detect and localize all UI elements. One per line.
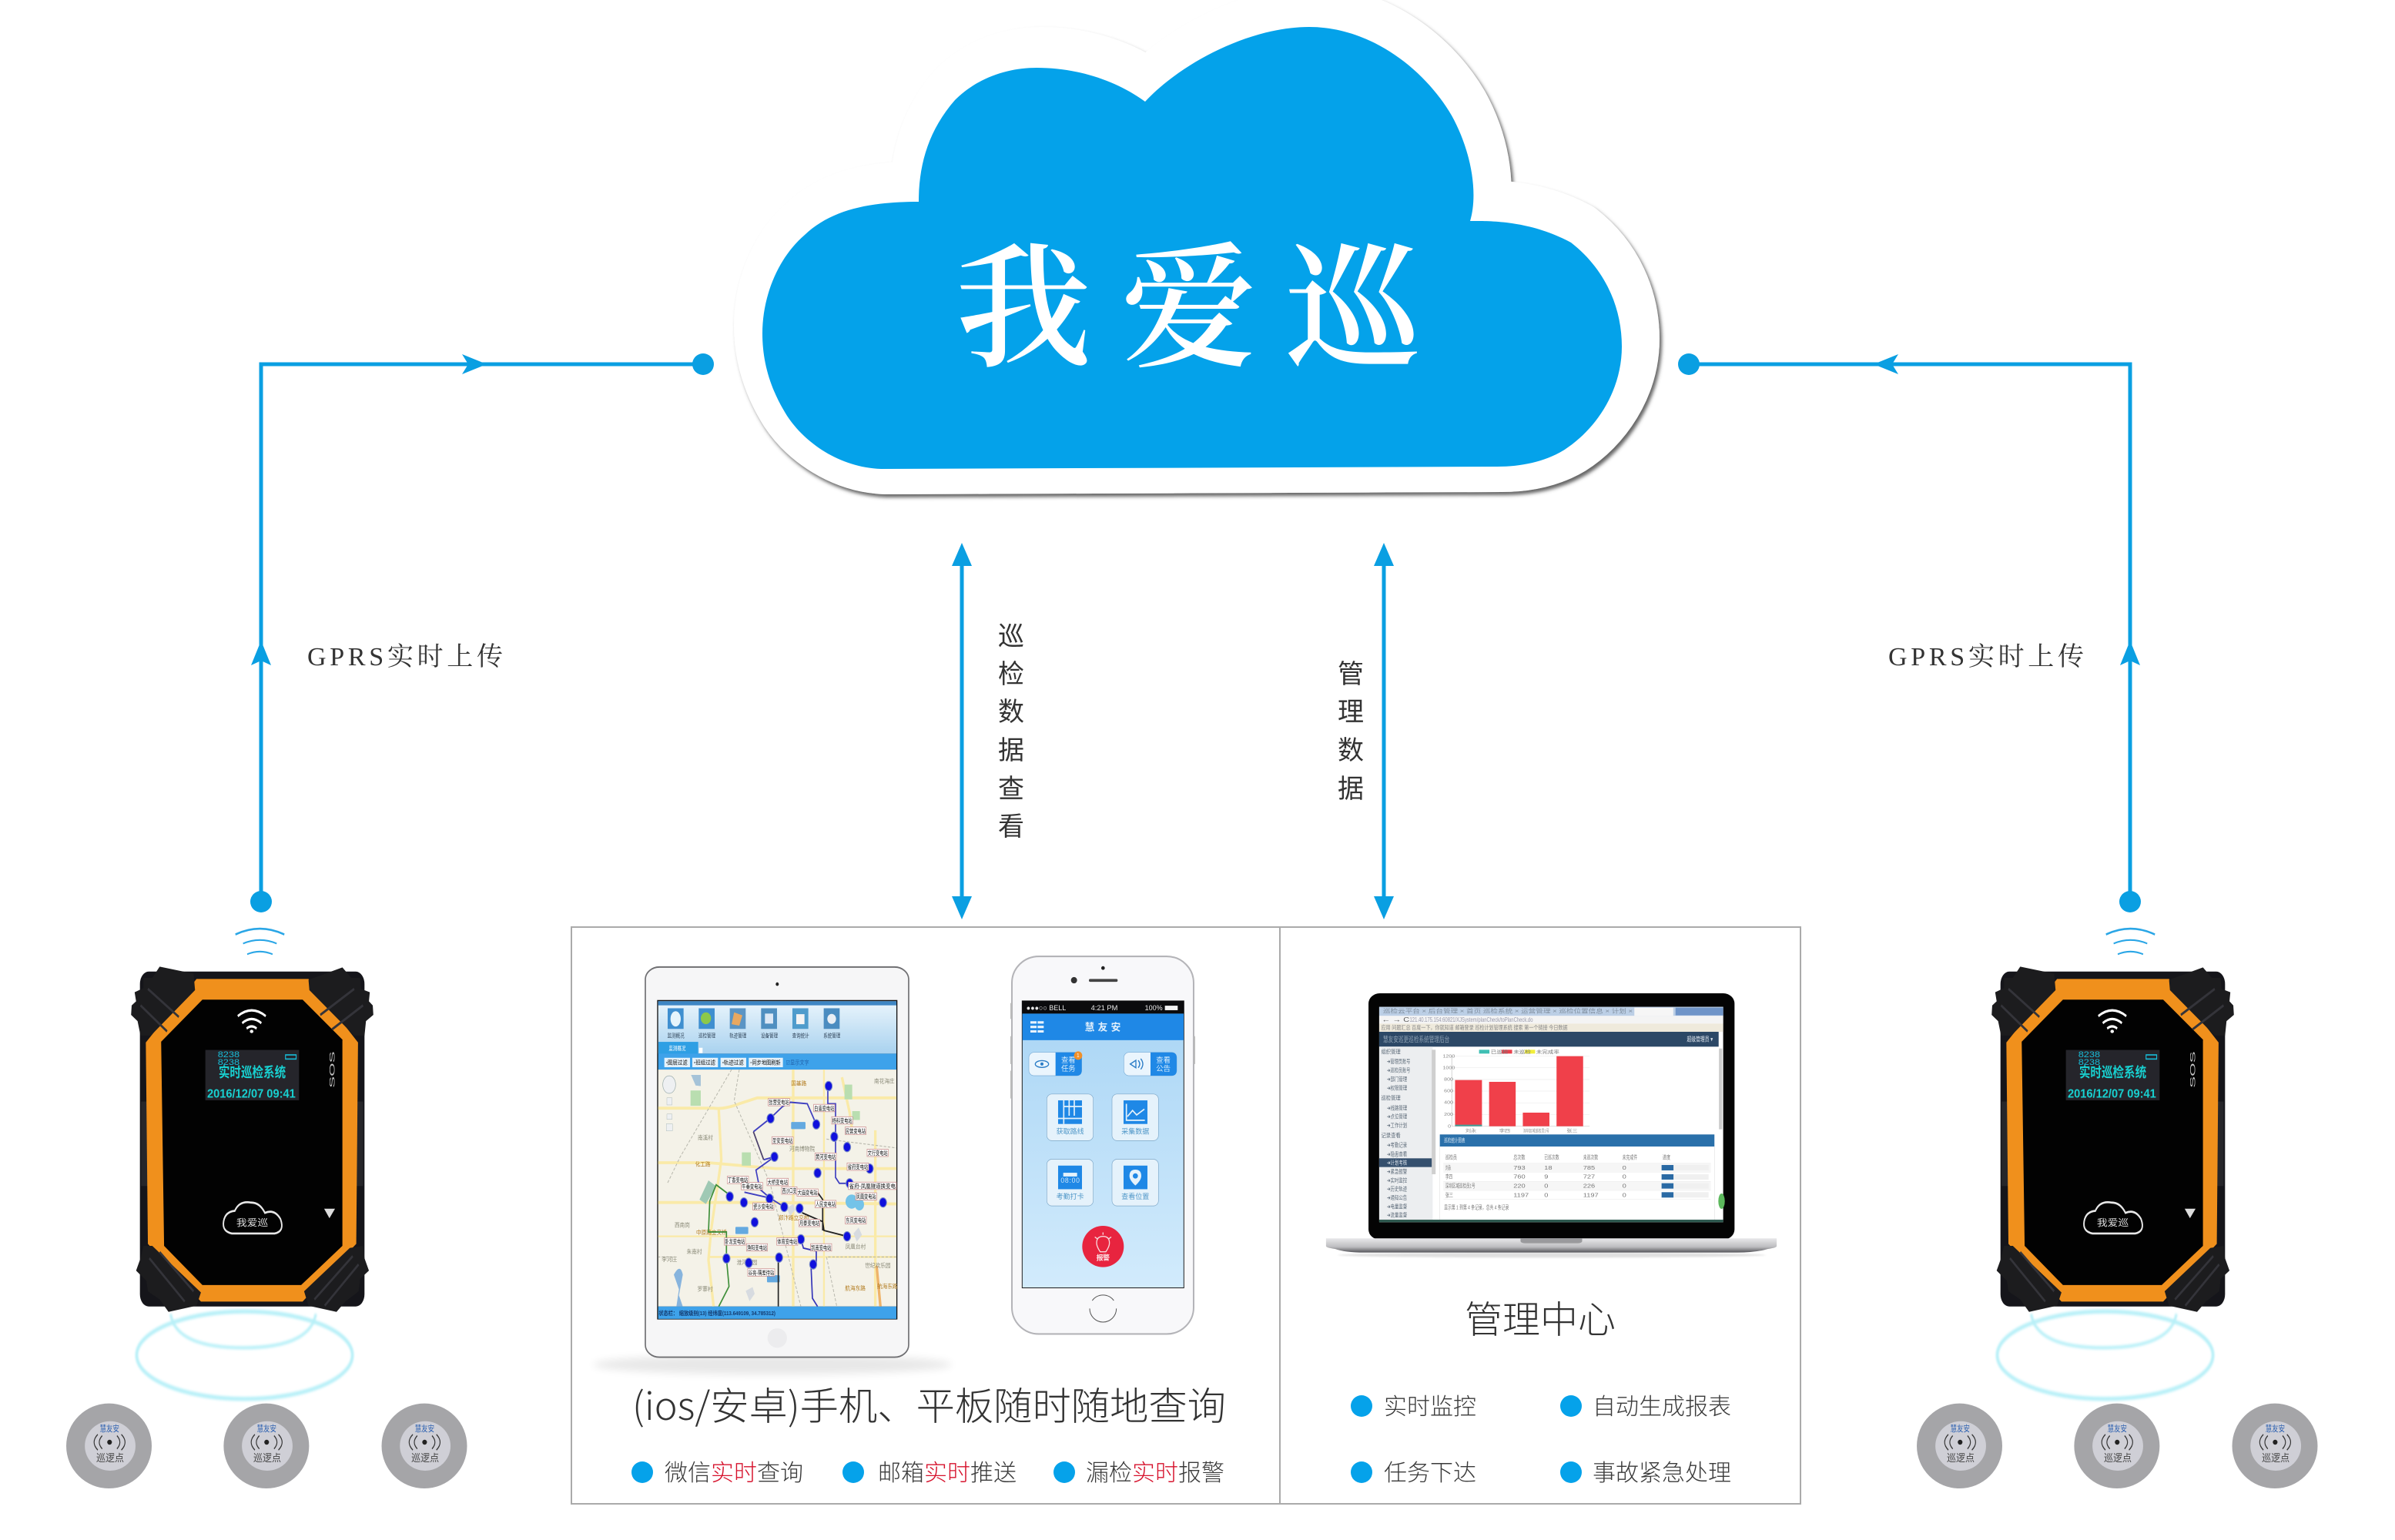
- tablet app toolbar: [658, 1008, 840, 1054]
- statistics table: 张三: [1445, 1191, 1453, 1198]
- statistics table: 9: [1544, 1173, 1549, 1180]
- tablet map: 李河庄: [662, 1256, 677, 1263]
- tablet map: 西南岗: [675, 1221, 690, 1229]
- feature: missed-check alarm: 漏检实时报警: [1086, 1454, 1224, 1488]
- right signal waves: [2106, 929, 2155, 954]
- console sidebar: 记录查看: [1381, 1132, 1401, 1139]
- console header: 慧友安巡更巡检系统管理后台: [1383, 1035, 1449, 1044]
- arrow: right device to cloud: [1678, 353, 2141, 912]
- tablet app toolbar: 查询统计: [792, 1032, 809, 1040]
- tablet map: 大庙变电站: [798, 1189, 818, 1197]
- bar chart: 800: [1444, 1077, 1454, 1082]
- tablet map: 航海东路: [845, 1284, 866, 1291]
- tablet map: 圣安变电站: [772, 1137, 792, 1144]
- label: management data vertical: 管: [1338, 660, 1364, 689]
- statistics table: 220: [1513, 1183, 1526, 1189]
- patrol tag 2: 巡逻点: [253, 1453, 281, 1465]
- left patrol tags: [66, 1404, 467, 1488]
- tablet app toolbar: 设备管理: [761, 1032, 778, 1040]
- device cloud logo: 我爱巡: [2097, 1217, 2129, 1228]
- statistics table: 刘永: [1445, 1164, 1452, 1171]
- patrol tag 2: 慧友安: [257, 1424, 276, 1433]
- phone status bar: ●●●○○ BELL: [1027, 1004, 1066, 1012]
- statistics table: 785: [1583, 1164, 1596, 1171]
- tablet map: 文行变电站: [868, 1150, 888, 1157]
- tablet map: 淮河公园: [737, 1259, 757, 1266]
- tablet app toolbar: 监测概况: [668, 1032, 685, 1040]
- tablet filter bar: ☑显示文字: [786, 1059, 809, 1066]
- tablet map: 省府变电站: [848, 1163, 868, 1170]
- phone tiles: 考勤打卡: [1057, 1192, 1084, 1200]
- patrol tag 5: [2074, 1404, 2159, 1488]
- cloud: 我爱巡: 巡: [1285, 236, 1428, 386]
- statistics table: 深圳区域巡检员1号: [1445, 1183, 1476, 1189]
- tablet map: 黄河变电站: [816, 1153, 836, 1160]
- phone buttons: 1: [1077, 1053, 1080, 1059]
- statistics table: 0: [1623, 1173, 1626, 1180]
- console sidebar: 组织管理: [1381, 1049, 1401, 1055]
- patrol tag 4: [1917, 1404, 2002, 1488]
- statistics table: 1197: [1583, 1191, 1599, 1198]
- phone status bar: [1022, 1001, 1184, 1013]
- device cloud logo: 我爱巡: [236, 1217, 268, 1228]
- feature: wechat query: 微信实时查询: [665, 1454, 803, 1488]
- patrol tag 3: 巡逻点: [411, 1453, 439, 1465]
- tablet app toolbar: 轨迹管理: [729, 1032, 746, 1040]
- label: patrol data vertical: 巡: [998, 622, 1024, 651]
- patrol tag 6: 慧友安: [2266, 1424, 2285, 1433]
- left patrol device: [131, 929, 373, 1399]
- device cloud logo: [2084, 1202, 2142, 1234]
- phone header: [1023, 1013, 1184, 1040]
- tablet map: 航海东路: [877, 1283, 898, 1290]
- cloud: 我爱巡: 我: [956, 236, 1091, 386]
- tablet map: 体育变电站: [777, 1238, 797, 1245]
- bar chart: [1442, 1049, 1589, 1133]
- feature: live monitoring: 实时监控: [1384, 1388, 1476, 1421]
- device screen: 2016/12/07 09:41: [207, 1086, 296, 1100]
- statistics table: [1440, 1134, 1725, 1220]
- statistics table: 总次数: [1513, 1153, 1526, 1160]
- browser chrome: 121.40.175.154:60821/XJSystem/planCheck/toPlanCheck.do: [1410, 1016, 1532, 1023]
- nfc rings: [1997, 1311, 2213, 1399]
- patrol tag 1: 慧友安: [100, 1424, 119, 1433]
- patrol tag 3: 慧友安: [415, 1424, 434, 1433]
- console sidebar: [1379, 1046, 1435, 1220]
- label: patrol data vertical: 看: [998, 812, 1024, 842]
- tablet map: 国基路: [791, 1080, 806, 1087]
- phone buttons: 查看: [1061, 1056, 1076, 1065]
- console sidebar: ➜实时监控: [1387, 1177, 1408, 1183]
- console sidebar: ➜紧急报警: [1387, 1168, 1408, 1175]
- right patrol tags: [1917, 1404, 2317, 1488]
- bar chart: 已巡检: [1491, 1049, 1509, 1055]
- tablet map: 朱南村: [687, 1247, 702, 1255]
- tablet map: 西沙口变: [782, 1187, 796, 1194]
- phone alarm button: [1082, 1226, 1124, 1267]
- browser chrome: [1379, 1007, 1723, 1032]
- tablet map: 杨科变电站: [832, 1116, 852, 1124]
- tablet map: 南溪村: [698, 1134, 713, 1141]
- phone header: 慧友安: [1085, 1021, 1120, 1033]
- phone status bar: 4:21 PM: [1091, 1004, 1117, 1013]
- tablet app toolbar: 巡检管理: [698, 1032, 715, 1040]
- bar chart: 张三: [1566, 1128, 1578, 1133]
- tablet map: 凤凰台村: [846, 1243, 866, 1250]
- tablet app toolbar: 监测概况: [668, 1044, 685, 1052]
- statistics table: 226: [1583, 1183, 1596, 1189]
- patrol tag 1: 巡逻点: [96, 1453, 124, 1465]
- phone tiles: [1047, 1094, 1158, 1206]
- device screen: 8238: [2078, 1058, 2100, 1066]
- device screen: 8238: [218, 1050, 240, 1060]
- statistics table: 1197: [1513, 1191, 1529, 1198]
- patrol tag 6: [2233, 1404, 2317, 1488]
- right patrol device: SOS: [2189, 1051, 2196, 1088]
- console header: 超级管理员 ▾: [1687, 1035, 1713, 1043]
- tablet map: 罗寨村: [698, 1285, 713, 1293]
- statistics table: 760: [1513, 1173, 1526, 1180]
- patrol tag 5: 巡逻点: [2104, 1453, 2132, 1465]
- statistics table: 未巡次数: [1583, 1153, 1598, 1160]
- device screen: 8238: [2078, 1050, 2100, 1060]
- statistics table: 793: [1513, 1164, 1526, 1171]
- bar chart: 刘永: [1465, 1128, 1477, 1133]
- statistics table: 巡检员: [1445, 1153, 1457, 1160]
- statistics table: 已巡次数: [1544, 1153, 1559, 1160]
- tablet map: 瓷沙变电站: [753, 1203, 773, 1210]
- device screen: 实时巡检系统: [219, 1064, 286, 1081]
- bar chart: 0: [1448, 1124, 1452, 1129]
- heading: management center: 管理中心: [1465, 1290, 1616, 1344]
- browser chrome: 巡检云平台 × 后台管理 × 首页 巡检系统 × 运营管理 × 巡检位置信息 × 计划 ×: [1383, 1007, 1633, 1014]
- statistics table: 0: [1544, 1183, 1549, 1189]
- label: GPRS left: GPRS实时上传: [307, 642, 503, 671]
- phone buttons: [1029, 1051, 1177, 1076]
- console sidebar: ➜隐患查看: [1387, 1150, 1407, 1157]
- console sidebar: ➜考勤记录: [1387, 1142, 1407, 1148]
- arrow: left device to cloud: [250, 353, 714, 912]
- tablet map: 丁香变电站: [728, 1177, 748, 1183]
- device screen: 实时巡检系统: [2079, 1064, 2146, 1081]
- tablet filter bar: ▫图层过滤: [666, 1059, 688, 1066]
- browser chrome: 应用 问题汇总 百度一下，你就知道 邮箱登录 巡检计划管理系统 搜索 第一个链接 今日数据: [1381, 1024, 1568, 1031]
- tablet map: 民营变电站: [846, 1127, 866, 1134]
- tablet with map: [593, 967, 953, 1374]
- tablet filter bar: ▫班组过滤: [694, 1059, 715, 1066]
- bar chart: 200: [1444, 1113, 1454, 1117]
- label: management data vertical: 据: [1338, 775, 1364, 804]
- patrol tag 4: 巡逻点: [1947, 1453, 1975, 1465]
- laptop base: [1326, 1238, 1777, 1253]
- console header: [1379, 1032, 1719, 1046]
- device screen: [2066, 1050, 2159, 1100]
- bar chart: 未完成率: [1536, 1049, 1559, 1055]
- label: patrol data vertical: 检: [998, 660, 1024, 689]
- tablet map: 河南博物院: [789, 1145, 815, 1153]
- right patrol device: [1991, 966, 2234, 1399]
- cloud: 我爱巡: 爱: [1121, 236, 1257, 386]
- console sidebar: 巡检管理: [1381, 1095, 1401, 1101]
- tablet map: 人民变电站: [816, 1200, 836, 1208]
- label: patrol data vertical: 数: [998, 698, 1024, 727]
- console sidebar: ➜历史轨迹: [1387, 1186, 1408, 1192]
- tablet map: 渔阳变电站: [747, 1244, 767, 1251]
- phone status bar: 100%: [1145, 1004, 1163, 1012]
- tablet map: 白庙变电站: [814, 1104, 834, 1112]
- device screen: 8238: [218, 1058, 240, 1066]
- tablet map: 凯南变电站: [811, 1244, 831, 1251]
- icon: signal waves: [236, 929, 284, 954]
- statistics table: 李四: [1445, 1173, 1452, 1180]
- phone tiles: 08:00: [1060, 1177, 1080, 1184]
- arrow: patrol data two-way: [952, 543, 972, 919]
- caption: mobile query heading: (ios/安卓)手机、平板随时随地查询: [632, 1376, 1226, 1431]
- feature: task dispatch: 任务下达: [1384, 1454, 1476, 1488]
- tablet filter bar: ▫同步地图刷新: [750, 1059, 781, 1066]
- tablet map: 大桥变电站: [768, 1178, 788, 1186]
- label: GPRS right: GPRS实时上传: [1888, 642, 2084, 671]
- tablet status bar: [658, 1307, 896, 1319]
- tablet app toolbar: 系统管理: [823, 1032, 840, 1040]
- patrol tag 3: [382, 1404, 467, 1488]
- device screen: [206, 1050, 299, 1100]
- feature: auto reports: 自动生成报表: [1593, 1388, 1731, 1421]
- statistics table: 18: [1544, 1164, 1553, 1171]
- statistics table: 0: [1623, 1183, 1626, 1189]
- bar chart: 1000: [1442, 1066, 1455, 1070]
- statistics table: 0: [1544, 1191, 1549, 1198]
- bar chart: 李四: [1499, 1128, 1510, 1133]
- tablet map: 凤凰变电站: [856, 1193, 876, 1200]
- statistics table: 进度: [1663, 1153, 1670, 1160]
- tablet map: 省府-凤凰隧道换变电: [849, 1182, 896, 1190]
- tablet map: 化工路: [695, 1160, 711, 1168]
- console sidebar: ➜部门管理: [1387, 1076, 1408, 1083]
- tablet map: 张营变电站: [769, 1099, 789, 1106]
- cloud: 我爱巡: [762, 19, 1626, 469]
- console sidebar: ➜电量监督: [1387, 1203, 1407, 1210]
- statistics table: 0: [1623, 1191, 1626, 1198]
- phone tiles: 获取路线: [1057, 1127, 1084, 1135]
- tablet map: 世纪欢乐园: [865, 1261, 891, 1269]
- arrow: management data two-way: [1374, 543, 1394, 919]
- statistics table: 0: [1623, 1164, 1626, 1171]
- device screen: 2016/12/07 09:41: [2068, 1086, 2156, 1100]
- phone tiles: 查看位置: [1121, 1192, 1149, 1200]
- console sidebar: ➜通知公告: [1387, 1194, 1407, 1201]
- bar chart: 400: [1444, 1100, 1454, 1105]
- tablet map: 中原路立交桥: [696, 1229, 727, 1236]
- patrol tag 6: 巡逻点: [2262, 1453, 2289, 1465]
- patrol tag 5: 慧友安: [2108, 1424, 2127, 1433]
- tablet filter bar: ▫轨迹过滤: [722, 1059, 744, 1066]
- label: patrol data vertical: 查: [998, 775, 1024, 804]
- feature: emergency handling: 事故紧急处理: [1593, 1454, 1731, 1488]
- tablet map: 东风变电站: [846, 1217, 866, 1224]
- bar chart: 600: [1444, 1089, 1454, 1093]
- bar chart: 深圳区域巡检员1号: [1523, 1128, 1549, 1133]
- bar chart: 1200: [1442, 1054, 1455, 1059]
- tablet map: 卧龙变电站: [725, 1238, 745, 1245]
- patrol tag 1: [66, 1404, 152, 1488]
- nfc rings: [136, 1311, 353, 1399]
- label: management data vertical: 理: [1338, 698, 1364, 727]
- statistics table: 未完成件: [1623, 1153, 1637, 1160]
- label: management data vertical: 数: [1338, 736, 1364, 765]
- label: patrol data vertical: 据: [998, 736, 1024, 765]
- tablet map: 谷亮-隅差待站: [749, 1269, 774, 1277]
- tablet map: [658, 1070, 898, 1307]
- bar chart: 未巡检: [1513, 1049, 1531, 1055]
- phone tiles: 采集数据: [1121, 1127, 1149, 1135]
- console sidebar: ➜巡检员账号: [1387, 1067, 1410, 1073]
- console sidebar: ➜计划考核: [1387, 1159, 1408, 1166]
- laptop management console: [1326, 993, 1777, 1257]
- console sidebar: ➜权限管理: [1387, 1084, 1408, 1091]
- smartphone app: [1010, 956, 1195, 1334]
- device cloud logo: [223, 1202, 282, 1234]
- phone alarm button: 报警: [1097, 1254, 1110, 1262]
- tablet map: 月泰变电站: [799, 1220, 819, 1227]
- console sidebar: ➜线路管理: [1387, 1104, 1408, 1111]
- tablet map: 牛春变电站: [742, 1183, 762, 1190]
- console sidebar: ➜点位管理: [1387, 1113, 1408, 1120]
- panel: apps and management frame: [571, 927, 1800, 1504]
- phone buttons: 查看: [1156, 1056, 1171, 1065]
- feature: email push: 邮箱实时推送: [878, 1454, 1017, 1488]
- statistics table: 显示第 1 到第 4 条记录，总共 4 条记录: [1444, 1204, 1509, 1210]
- tablet map: 郑汴路立交桥: [779, 1214, 809, 1221]
- label: patrol data vertical: [998, 622, 1024, 842]
- left patrol device: SOS: [328, 1051, 336, 1088]
- console sidebar: ➜管理员账号: [1387, 1058, 1410, 1065]
- patrol tag 2: [223, 1404, 309, 1488]
- phone buttons: 任务: [1061, 1064, 1076, 1073]
- statistics table: 巡检统计图表: [1444, 1137, 1465, 1143]
- tablet filter bar: [658, 1053, 896, 1070]
- patrol tag 4: 慧友安: [1951, 1424, 1970, 1433]
- browser chrome: ← → C: [1382, 1016, 1409, 1024]
- console sidebar: ➜工作计划: [1387, 1122, 1407, 1129]
- tablet map: 南花海庄: [874, 1077, 895, 1085]
- label: management data vertical: [1338, 660, 1364, 804]
- statistics table: 727: [1583, 1173, 1596, 1180]
- console sidebar: ➜流量监督: [1387, 1212, 1407, 1218]
- phone buttons: 公告: [1156, 1064, 1171, 1073]
- tablet status bar: 状态栏： 缩放级别(13) 经纬度(113.649109, 34.785312): [658, 1310, 776, 1317]
